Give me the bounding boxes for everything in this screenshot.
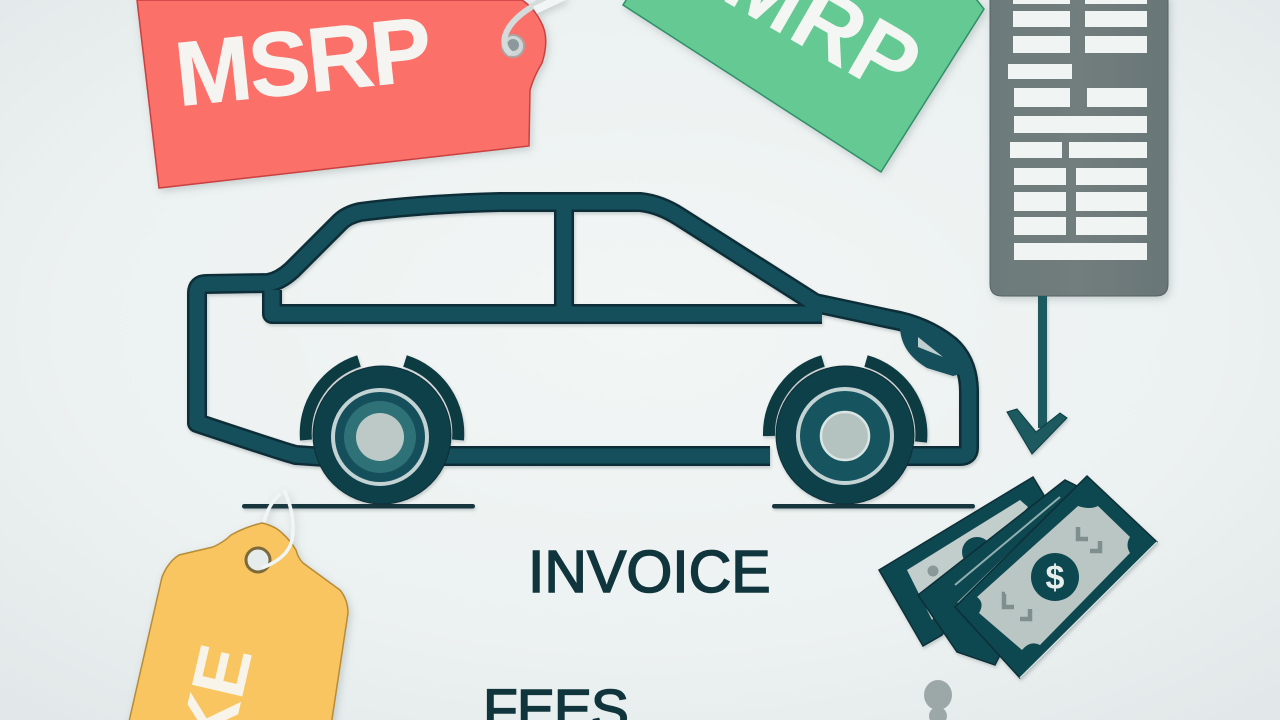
- rear wheel: [306, 361, 458, 504]
- INVOICE label: INVOICE: [528, 539, 771, 605]
- tag string: [262, 490, 293, 568]
- arrow from document to money: [1007, 296, 1067, 454]
- front bill: [955, 476, 1157, 678]
- red MSRP price tag: [137, 0, 565, 188]
- back bill: [879, 477, 1045, 646]
- ground lines: [242, 504, 975, 508]
- yellow price tag: [128, 490, 348, 720]
- middle bills: [918, 480, 1085, 665]
- headlight: [900, 326, 968, 376]
- car body: [197, 202, 969, 457]
- stack of dollar bills: [879, 476, 1157, 678]
- grey person silhouette: [924, 680, 952, 720]
- front wheel: [769, 361, 921, 504]
- car outline illustration: [197, 202, 975, 508]
- dollar coin: [1031, 553, 1079, 601]
- dollar coin: $: [1046, 559, 1065, 597]
- MSRP label: MSRP: [171, 0, 435, 126]
- document sheet with table rows: [990, 0, 1168, 296]
- green MRP price tag: [623, 0, 984, 172]
